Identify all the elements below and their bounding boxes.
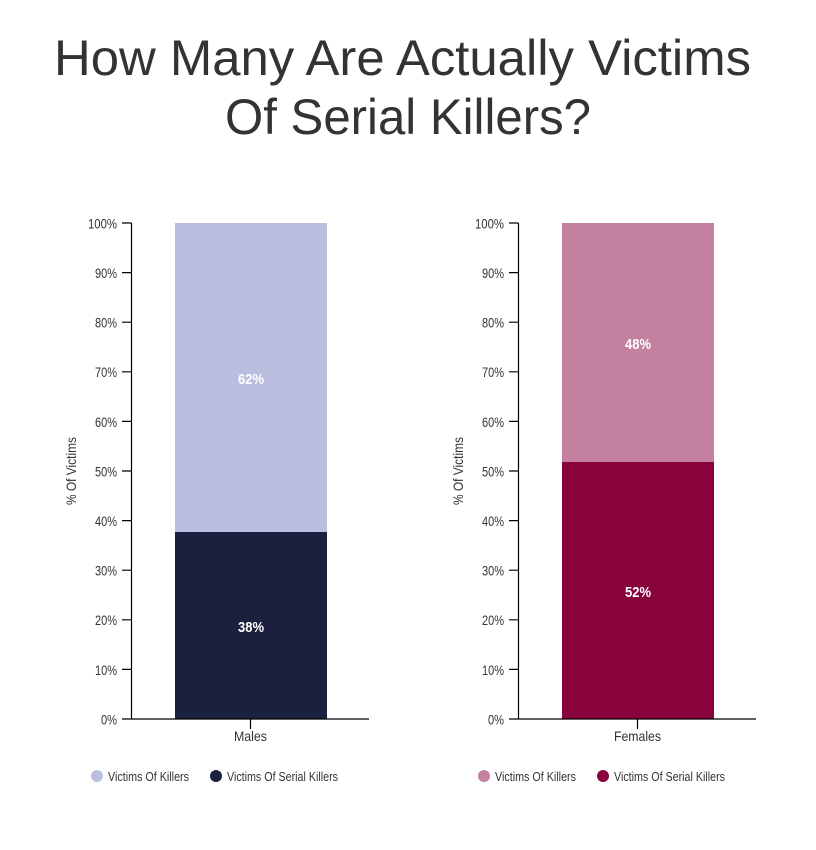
x axis: males: [122, 719, 369, 744]
y axis: males: 50%: [95, 464, 117, 480]
legend: females: [478, 770, 725, 784]
y axis: females: [475, 216, 518, 728]
y axis: females: 40%: [482, 513, 504, 529]
y axis: females: 100%: [475, 216, 504, 232]
y axis: females: 30%: [482, 562, 504, 578]
legend: males: [91, 770, 338, 784]
panel: females chart: [450, 216, 756, 784]
y axis: males: 30%: [95, 562, 117, 578]
y axis: males: 100%: [88, 216, 117, 232]
y axis: females: 20%: [482, 612, 504, 628]
value label: 48%: 48%: [625, 336, 651, 353]
bar segment: victims of serial killers, 38%: [175, 532, 327, 719]
legend: males: Victims Of Killers: [108, 770, 189, 784]
x axis: males: Males: [234, 728, 267, 744]
y axis: males: 10%: [95, 662, 117, 678]
bar segment: victims of serial killers, 52%: [562, 462, 714, 719]
y axis: females: 10%: [482, 662, 504, 678]
y axis: females: 90%: [482, 265, 504, 281]
y axis: males: 40%: [95, 513, 117, 529]
title: Of Serial Killers?: [225, 89, 591, 145]
value label: 38%: 38%: [238, 619, 264, 636]
value label: 62%: 62%: [238, 371, 264, 388]
title: [54, 30, 751, 145]
bar segment: victims of killers, 48%: [562, 223, 714, 462]
axis title: females: % Of Victims: [450, 437, 466, 505]
y axis: males: 80%: [95, 314, 117, 330]
y axis: females: 70%: [482, 364, 504, 380]
y axis: females: 50%: [482, 464, 504, 480]
y axis: females: 0%: [488, 712, 504, 728]
x axis: females: Females: [614, 728, 661, 744]
title: How Many Are Actually Victims: [54, 30, 751, 86]
y axis: males: 0%: [101, 712, 117, 728]
x axis: females: [509, 719, 756, 744]
y axis: males: 90%: [95, 265, 117, 281]
y axis: males: [88, 216, 132, 728]
bar segment: victims of killers, 62%: [175, 223, 327, 532]
legend: females: Victims Of Serial Killers: [614, 770, 725, 784]
legend: females: Victims Of Killers: [495, 770, 576, 784]
y axis: males: 60%: [95, 414, 117, 430]
y axis: females: 60%: [482, 414, 504, 430]
y axis: females: 80%: [482, 314, 504, 330]
legend: males: Victims Of Serial Killers: [227, 770, 338, 784]
y axis: males: 20%: [95, 612, 117, 628]
axis title: males: % Of Victims: [63, 437, 79, 505]
value label: 52%: 52%: [625, 584, 651, 601]
y axis: males: 70%: [95, 364, 117, 380]
panel: males chart: [63, 216, 369, 784]
